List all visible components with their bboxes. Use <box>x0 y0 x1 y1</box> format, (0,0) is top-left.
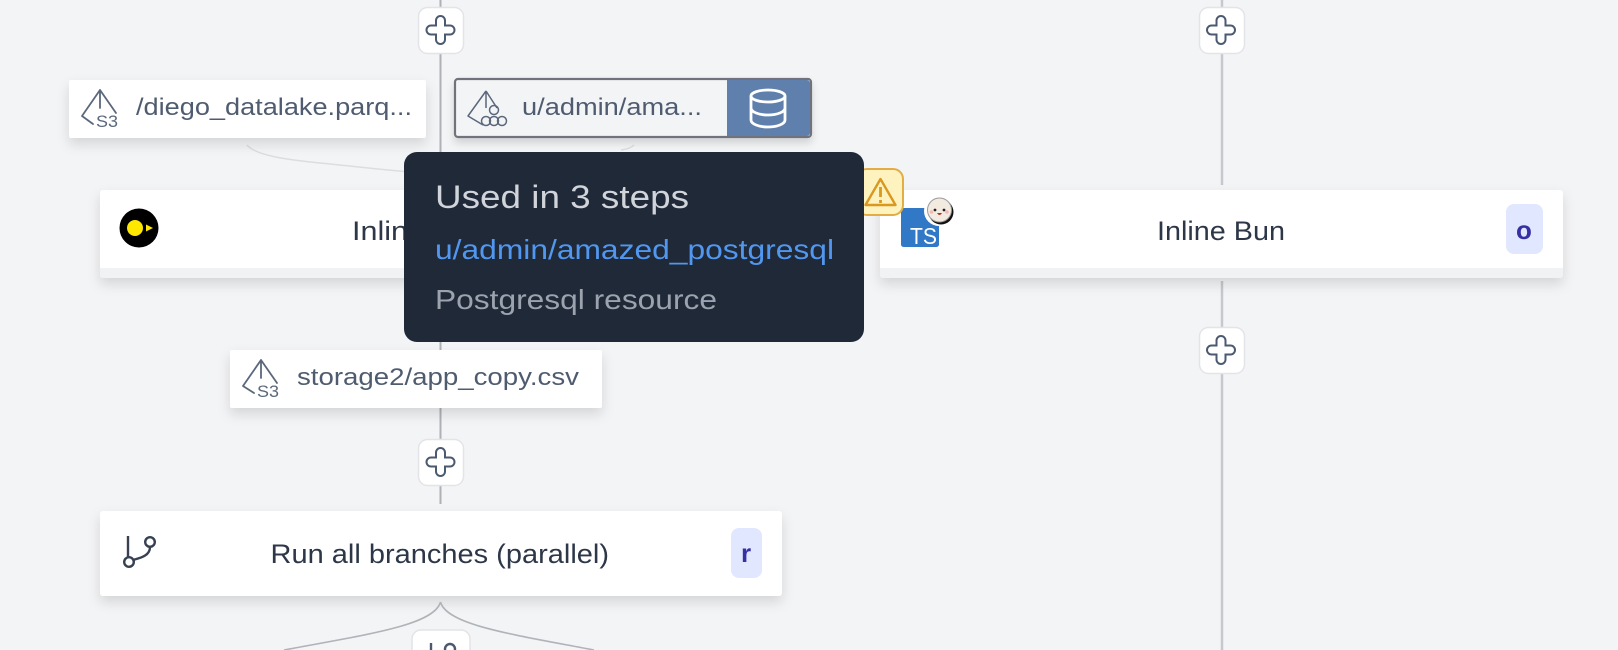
branch button bottom <box>412 630 470 650</box>
resource path link: u/admin/amazed_postgresql <box>435 234 834 265</box>
branch split curves <box>284 602 594 650</box>
step id badge o <box>1506 204 1543 254</box>
resource connector curves <box>247 145 634 172</box>
step id badge o: o <box>1516 215 1532 245</box>
S3 file chip: app_copy.csv <box>230 350 602 408</box>
icon: Bun mascot <box>924 196 954 226</box>
icon: TypeScript square <box>901 208 939 249</box>
icon: black and yellow logo <box>120 208 158 248</box>
resource type: Postgresql resource <box>435 284 717 315</box>
icon: git branch small <box>431 643 455 650</box>
step label: Inlin <box>352 216 408 246</box>
icon: database <box>751 90 785 127</box>
icon: S3 pyramid <box>243 360 279 401</box>
icon: S3 pyramid: S3 <box>257 383 279 401</box>
right column connector line <box>1221 0 1223 650</box>
icon: resource pyramid <box>468 91 506 126</box>
plus button right lower <box>1200 328 1244 374</box>
plus button top right <box>1200 8 1244 54</box>
icon: S3 pyramid: S3 <box>96 113 118 131</box>
left column connector line <box>440 0 442 504</box>
tooltip heading: Used in 3 steps <box>435 179 689 215</box>
chip label: storage2/app_copy.csv <box>297 364 579 391</box>
plus button top left <box>418 8 464 54</box>
plus button left lower <box>418 440 464 486</box>
step label: Inline Bun <box>1157 216 1285 246</box>
S3 file chip: diego_datalake <box>69 80 426 138</box>
resource chip: amazed_postgresql (selected) <box>455 79 811 137</box>
step id badge r: r <box>741 538 751 568</box>
step card: Inline (left) <box>100 190 782 278</box>
step card: Run all branches <box>100 511 782 596</box>
step id badge r <box>731 528 762 578</box>
warning badge <box>857 169 903 215</box>
database button <box>727 80 810 136</box>
icon: git branch <box>124 536 155 567</box>
icon: S3 pyramid <box>82 90 118 131</box>
step label: Run all branches (parallel) <box>270 539 609 569</box>
step card: Inline Bun <box>880 190 1563 278</box>
chip label: u/admin/ama... <box>522 94 702 121</box>
icon: TypeScript square: TS <box>910 223 937 249</box>
chip label: /diego_datalake.parq... <box>136 94 412 121</box>
tooltip <box>404 152 864 342</box>
